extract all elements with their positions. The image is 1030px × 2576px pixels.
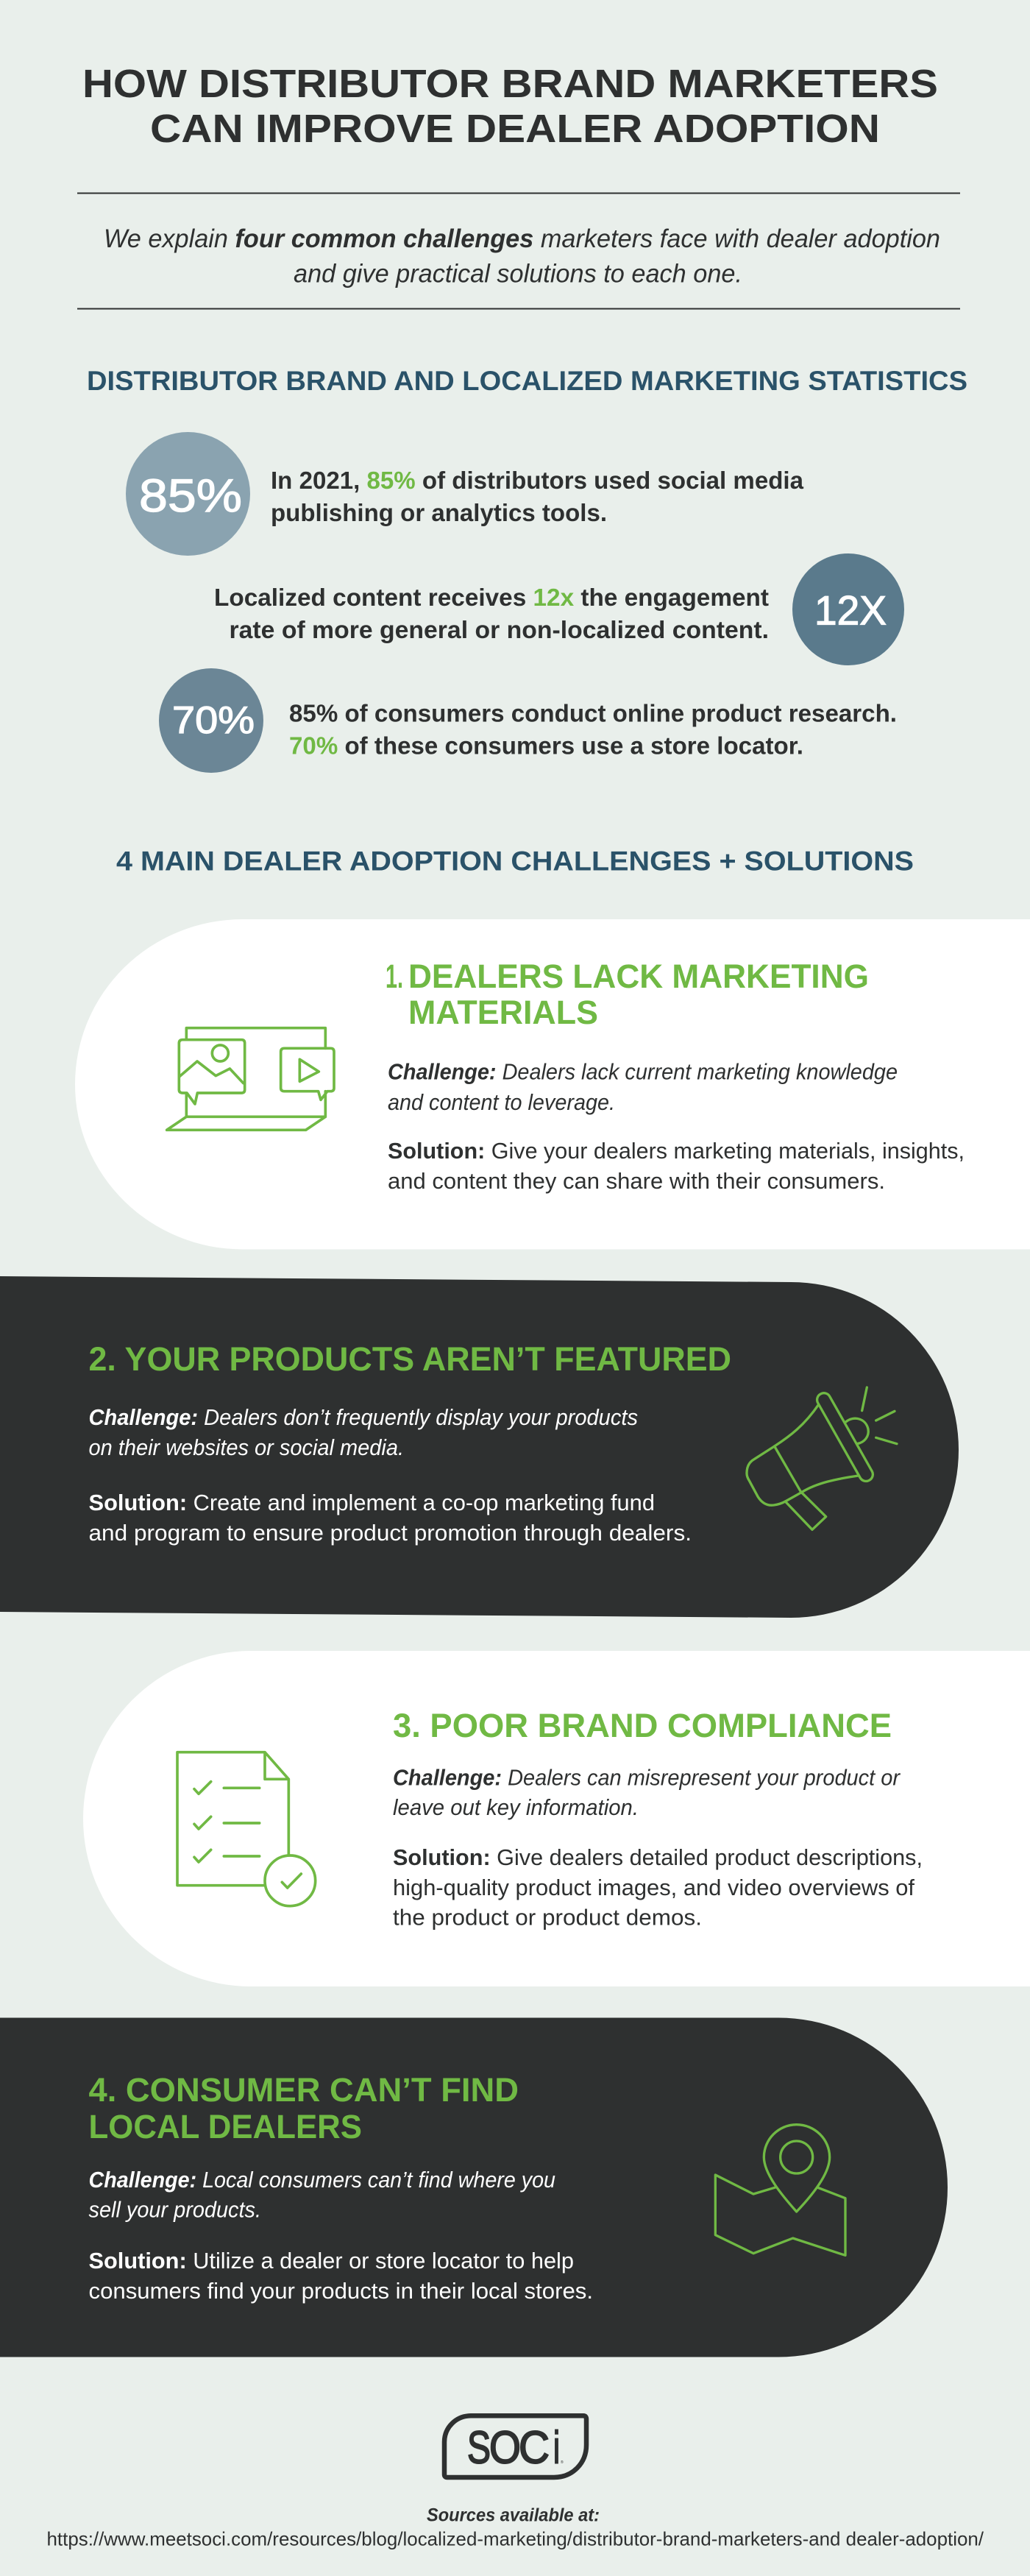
panel 2 solution: and program to ensure product promotion through dealers. (88, 1520, 692, 1546)
panel 4 challenge: Challenge: Local consumers can’t find where you (88, 2167, 555, 2193)
stat: 70%: 85% of consumers conduct online product research. (289, 699, 897, 727)
panel 2: your products aren't featured (0, 1276, 959, 1618)
panel 3 heading: 3. POOR BRAND COMPLIANCE (393, 1707, 892, 1744)
logo: SOCi (444, 2416, 586, 2477)
stat: 70% (159, 668, 897, 773)
intro text (104, 224, 940, 289)
title (82, 62, 938, 151)
sources: https://www.meetsoci.com/resources/blog/localized-marketing/distributor-brand-marketers-and dealer-adoption/ (47, 2528, 984, 2550)
icon: map with pin (715, 2125, 845, 2255)
panel 3 solution: the product or product demos. (393, 1905, 702, 1930)
panel 2 challenge (88, 1404, 638, 1460)
panel 3 challenge: Challenge: Dealers can misrepresent your product or (393, 1765, 901, 1790)
title: CAN IMPROVE DEALER ADOPTION (150, 107, 880, 151)
panel 2 solution: Solution: Create and implement a co-op marketing fund (88, 1490, 655, 1515)
panel 2 heading: 2. YOUR PRODUCTS AREN’T FEATURED (88, 1340, 731, 1378)
title: HOW DISTRIBUTOR BRAND MARKETERS (82, 62, 938, 106)
stat: 85%: 85% (139, 470, 242, 522)
stat: 85% (126, 432, 804, 556)
icon: megaphone (747, 1387, 897, 1529)
stat: 12X: rate of more general or non-localized content. (230, 616, 769, 643)
stat: 12X (214, 553, 904, 665)
panel 1 heading: MATERIALS (408, 994, 598, 1031)
panel 3 solution: Solution: Give dealers detailed product descriptions, (393, 1844, 923, 1870)
panel 4 challenge (88, 2167, 555, 2223)
panel 1 challenge (388, 1058, 898, 1115)
sources: Sources available at: (427, 2505, 600, 2526)
sources (47, 2505, 984, 2550)
panel 3: poor brand compliance (83, 1651, 1030, 1986)
panel 1 heading: DEALERS LACK MARKETING (408, 958, 869, 995)
logo: SOCi: C (519, 2423, 550, 2474)
panel 1 heading (386, 958, 869, 1031)
heading: statistics: DISTRIBUTOR BRAND AND LOCALIZED MARKETING STATISTICS (87, 366, 967, 396)
panel 2 challenge: Challenge: Dealers don’t frequently display your products (88, 1404, 638, 1430)
stat: 12X: 12X (814, 587, 887, 633)
stat: 12X: Localized content receives 12x the engagement (214, 584, 769, 611)
panel 4: consumer can't find local dealers (0, 2018, 948, 2357)
panel 4 heading: 4. CONSUMER CAN’T FIND (88, 2071, 519, 2109)
stat: 70%: 70% of these consumers use a store locator. (289, 732, 803, 760)
panel 1 solution (388, 1138, 965, 1194)
logo: SOCi: S (467, 2423, 491, 2474)
panel 1 solution: and content they can share with their consumers. (388, 1168, 885, 1194)
panel 3 challenge: leave out key information. (393, 1794, 639, 1820)
logo: SOCi: i (553, 2423, 560, 2474)
panel 3 solution (393, 1844, 923, 1930)
panel 4 solution: consumers find your products in their local stores. (88, 2278, 593, 2304)
panel 4 heading (88, 2071, 519, 2145)
stat: 85%: publishing or analytics tools. (271, 499, 607, 526)
stat: 70%: 70% (172, 699, 255, 742)
panel 3 solution: high-quality product images, and video overviews of (393, 1875, 914, 1900)
panel 3 challenge (393, 1765, 901, 1820)
panel 1 challenge: and content to leverage. (388, 1089, 615, 1115)
panel 4 solution (88, 2248, 593, 2304)
panel 4 heading: LOCAL DEALERS (88, 2108, 362, 2145)
panel 4 challenge: sell your products. (88, 2197, 261, 2223)
heading: challenges: 4 MAIN DEALER ADOPTION CHALLENGES + SOLUTIONS (116, 846, 914, 877)
intro text: We explain four common challenges marketers face with dealer adoption (104, 224, 940, 253)
panel 1 solution: Solution: Give your dealers marketing materials, insights, (388, 1138, 965, 1164)
panel 1: dealers lack marketing materials (75, 919, 1030, 1250)
panel 1 heading: 1. (386, 958, 403, 995)
intro text: and give practical solutions to each one. (294, 259, 742, 289)
stat: 85%: In 2021, 85% of distributors used social media (271, 467, 804, 494)
logo: SOCi: ® (561, 2460, 564, 2465)
logo: SOCi: O (489, 2423, 521, 2474)
panel 2 challenge: on their websites or social media. (88, 1434, 404, 1460)
icon: checklist document (177, 1752, 316, 1906)
panel 4 solution: Solution: Utilize a dealer or store locator to help (88, 2248, 574, 2274)
icon: laptop with media bubbles (167, 1028, 334, 1130)
panel 2 solution (88, 1490, 692, 1546)
panel 1 challenge: Challenge: Dealers lack current marketing knowledge (388, 1058, 898, 1085)
